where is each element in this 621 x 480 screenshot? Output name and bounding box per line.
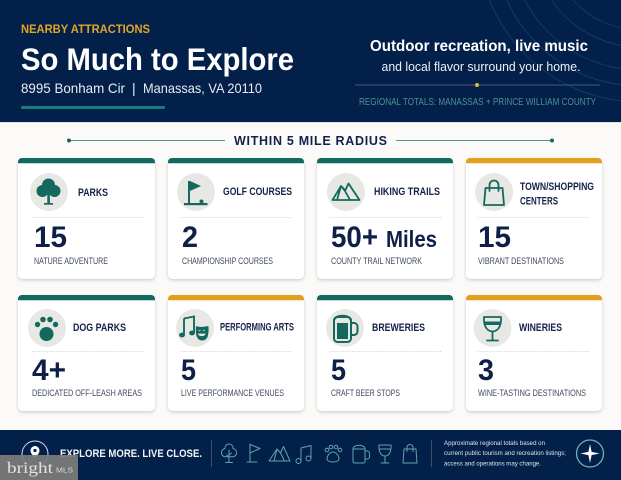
icon: golf flag bbox=[184, 181, 208, 205]
section heading: WITHIN 5 MILE RADIUS bbox=[234, 134, 387, 148]
title underline bbox=[21, 106, 165, 109]
icon: paw outline bbox=[327, 452, 339, 462]
panel: dog parks: 4+ bbox=[32, 354, 66, 387]
panel: hiking trails bbox=[317, 158, 453, 279]
panel: breweries: CRAFT BEER STOPS bbox=[331, 388, 400, 398]
panel: town and shopping centers: VIBRANT DESTINATIONS bbox=[478, 256, 564, 266]
icon: bag outline bbox=[403, 444, 417, 463]
panel: parks: PARKS bbox=[78, 187, 108, 199]
icon: tree bbox=[36, 178, 60, 205]
footer band bbox=[0, 430, 621, 480]
panel: town and shopping centers: 15 bbox=[478, 221, 511, 254]
panel: golf courses: CHAMPIONSHIP COURSES bbox=[182, 256, 273, 266]
icon: wine outline bbox=[379, 445, 391, 463]
watermark: bright MLS: MLS bbox=[56, 466, 73, 474]
tagline: and local flavor surround your home. bbox=[382, 59, 580, 74]
tagline bbox=[370, 38, 588, 74]
panel: wineries: 3 bbox=[478, 354, 494, 387]
panel: town and shopping centers: CENTERS bbox=[520, 196, 558, 208]
panel: breweries bbox=[317, 295, 453, 411]
panel: golf courses: GOLF COURSES bbox=[223, 186, 292, 198]
footer disclaimer: current public tourism and recreation listings; bbox=[444, 450, 566, 457]
icon: flag outline bbox=[247, 444, 260, 462]
footer disclaimer: access and operations may change. bbox=[444, 460, 541, 468]
address bbox=[21, 80, 262, 96]
footer disclaimer bbox=[444, 440, 566, 468]
panel: performing arts bbox=[168, 295, 304, 411]
panel: dog parks: DOG PARKS bbox=[73, 322, 126, 334]
icon: mountains bbox=[332, 184, 360, 200]
icon: wine glass bbox=[484, 317, 501, 340]
icon: mug outline bbox=[353, 445, 370, 463]
icon: location pin in circle bbox=[22, 441, 48, 467]
tagline: Outdoor recreation, live music bbox=[370, 38, 588, 55]
tagline divider with dot bbox=[355, 83, 600, 87]
panel: wineries: WINE-TASTING DESTINATIONS bbox=[478, 388, 586, 398]
icon: shopping bag bbox=[484, 180, 504, 205]
panel: golf courses bbox=[168, 158, 304, 279]
panel: performing arts: PERFORMING ARTS bbox=[220, 322, 294, 334]
panel: performing arts: LIVE PERFORMANCE VENUES bbox=[181, 388, 284, 398]
address: Manassas, VA 20110 bbox=[143, 80, 262, 96]
panel: town and shopping centers bbox=[466, 158, 602, 279]
panel: golf courses: 2 bbox=[182, 221, 198, 254]
eyebrow: nearby attractions: NEARBY ATTRACTIONS bbox=[21, 24, 150, 36]
icon: beer mug bbox=[334, 316, 358, 342]
footer icon row bbox=[221, 444, 417, 464]
panel: hiking trails: HIKING TRAILS bbox=[374, 186, 440, 198]
panel: parks: 15 bbox=[34, 221, 67, 254]
panel: town and shopping centers: TOWN/SHOPPING bbox=[520, 181, 594, 193]
header banner bbox=[0, 0, 621, 123]
panel: parks: NATURE ADVENTURE bbox=[34, 256, 108, 266]
icon: tree outline bbox=[221, 444, 237, 462]
title: So Much to Explore bbox=[21, 41, 294, 77]
panel: wineries bbox=[466, 295, 602, 411]
panel: hiking trails: 50+ bbox=[331, 221, 378, 254]
panel: hiking trails: Miles bbox=[386, 226, 437, 252]
panel: dog parks: DEDICATED OFF-LEASH AREAS bbox=[32, 388, 142, 398]
icon: music outline bbox=[301, 446, 311, 461]
watermark: bright MLS: bright bbox=[7, 460, 54, 477]
address: 8995 Bonham Cir bbox=[21, 80, 125, 96]
panel: hiking trails: COUNTY TRAIL NETWORK bbox=[331, 256, 422, 266]
panel: breweries: 5 bbox=[331, 354, 346, 387]
icon: music note and mask bbox=[179, 316, 209, 340]
icon: mountains outline bbox=[269, 446, 290, 461]
panel: parks bbox=[18, 158, 155, 279]
address: | bbox=[132, 80, 136, 96]
icon: paw bbox=[35, 317, 58, 341]
panel: dog parks bbox=[18, 295, 155, 411]
watermark: bright MLS bbox=[0, 455, 78, 480]
panel: breweries: BREWERIES bbox=[372, 322, 425, 334]
section heading bbox=[67, 134, 554, 148]
panel: performing arts: 5 bbox=[181, 354, 196, 387]
panel: wineries: WINERIES bbox=[519, 322, 562, 334]
footer disclaimer: Approximate regional totals based on bbox=[444, 440, 545, 447]
icon: compass bbox=[576, 440, 604, 467]
footer slogan: EXPLORE MORE. LIVE CLOSE. bbox=[60, 448, 202, 460]
